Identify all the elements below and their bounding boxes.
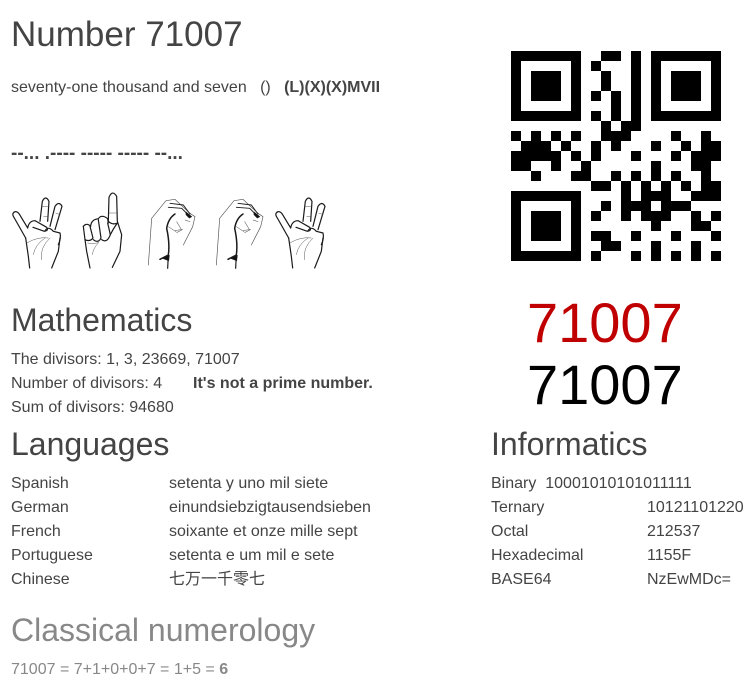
languages table: Portuguese bbox=[11, 547, 93, 564]
heading: languages: Languages bbox=[11, 426, 169, 462]
number of divisors: Number of divisors: 4 bbox=[11, 375, 162, 392]
informatics table: Binary 10001010101011111 bbox=[491, 475, 692, 492]
languages table: German bbox=[11, 499, 69, 516]
icon: hand zero bbox=[148, 199, 195, 268]
number in words and roman numeral: seventy-one thousand and seven () (L)(X)(X)MVII bbox=[11, 79, 380, 96]
languages table: Spanish bbox=[11, 475, 69, 492]
languages table: einundsiebzigtausendsieben bbox=[169, 499, 371, 516]
icon: hand zero bbox=[216, 199, 263, 268]
sign language hands bbox=[12, 192, 326, 269]
heading: informatics: Informatics bbox=[491, 426, 647, 462]
languages table: Chinese bbox=[11, 571, 70, 588]
heading: classical numerology: Classical numerology bbox=[11, 612, 315, 648]
informatics table: BASE64 bbox=[491, 571, 551, 588]
sum of divisors: Sum of divisors: 94680 bbox=[11, 399, 174, 416]
informatics table: 212537 bbox=[647, 523, 700, 540]
informatics table: Hexadecimal bbox=[491, 547, 583, 564]
informatics table: 10121101220 bbox=[647, 499, 744, 516]
prime statement: It's not a prime number. bbox=[193, 375, 373, 392]
languages table: setenta e um mil e sete bbox=[169, 547, 334, 564]
title: Number 71007 bbox=[11, 15, 243, 54]
red number: 71007 bbox=[527, 291, 683, 354]
languages table: setenta y uno mil siete bbox=[169, 475, 328, 492]
morse code: --... .---- ----- ----- --... bbox=[11, 143, 183, 164]
languages table bbox=[11, 475, 371, 588]
languages table: French bbox=[11, 523, 61, 540]
languages table: soixante et onze mille sept bbox=[169, 523, 358, 540]
heading: mathematics: Mathematics bbox=[11, 302, 192, 338]
divisors: The divisors: 1, 3, 23669, 71007 bbox=[11, 351, 240, 368]
mathematics facts bbox=[11, 351, 373, 416]
QR code bbox=[511, 51, 721, 261]
informatics table: Ternary bbox=[491, 499, 544, 516]
informatics table: NzEwMDc= bbox=[647, 571, 731, 588]
icon: hand seven bbox=[276, 198, 325, 268]
icon: hand seven bbox=[13, 198, 62, 268]
icon: hand one bbox=[83, 193, 122, 268]
black number: 71007 bbox=[527, 353, 683, 416]
informatics table: 1155F bbox=[647, 547, 691, 564]
numerology calculation: 71007 = 7+1+0+0+7 = 1+5 = 6 bbox=[11, 661, 228, 678]
informatics table: Octal bbox=[491, 523, 528, 540]
languages table: 七万一千零七 bbox=[169, 571, 265, 588]
informatics table bbox=[491, 475, 744, 588]
